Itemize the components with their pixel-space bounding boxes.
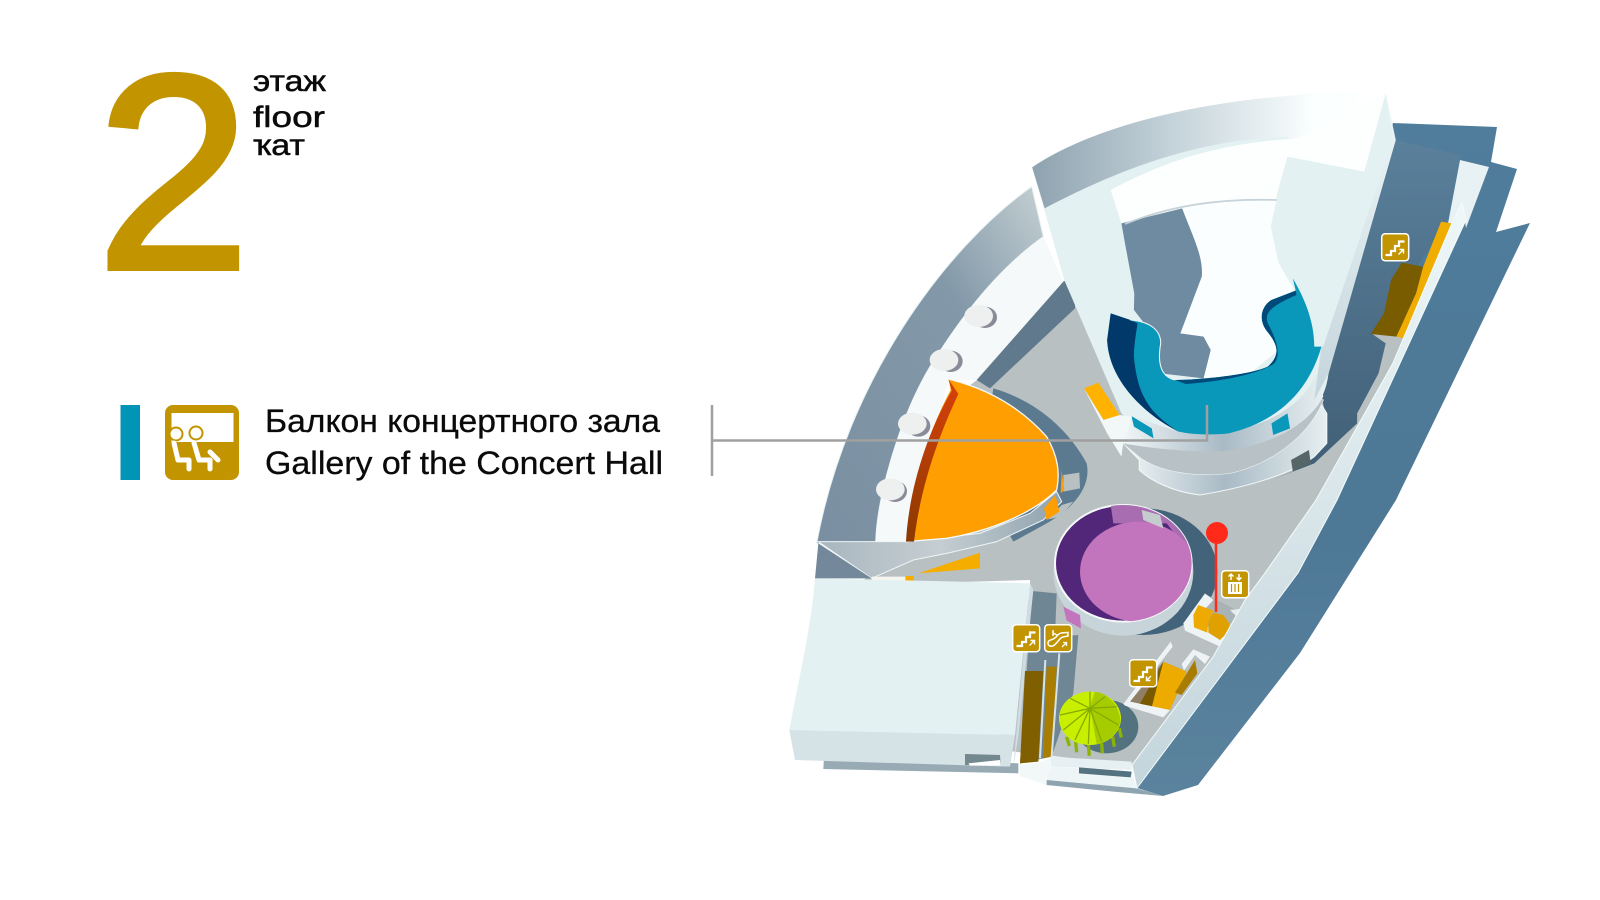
dome bbox=[1059, 692, 1121, 745]
cube two bbox=[1208, 613, 1229, 640]
dome columns bbox=[1067, 728, 1121, 756]
floor stubs in shadow bbox=[1048, 473, 1080, 519]
lower outer ring bbox=[1123, 393, 1327, 495]
hall stage shadow bbox=[1121, 208, 1211, 378]
balcony side yellow bbox=[1044, 470, 1064, 520]
cylinder shadow bbox=[1069, 508, 1217, 635]
right exterior wall bbox=[1132, 203, 1466, 788]
block door bbox=[965, 754, 1001, 765]
doorway bbox=[1291, 450, 1311, 472]
legend text: Gallery of the Concert Hall bbox=[265, 445, 663, 481]
white central zone bbox=[1111, 93, 1386, 347]
top arc band bbox=[1032, 93, 1386, 208]
icon: seated audience bbox=[165, 405, 239, 480]
lower front face bbox=[1047, 767, 1137, 788]
pale roof strip on the right bbox=[1446, 160, 1489, 234]
entrance base bbox=[1020, 758, 1137, 788]
dome ribs bbox=[1060, 692, 1118, 744]
floor label bbox=[253, 65, 326, 162]
dark blue lip bbox=[1175, 291, 1296, 384]
elevator cabin bbox=[1183, 593, 1245, 647]
cube one bbox=[1193, 605, 1213, 633]
tray walls bbox=[1183, 593, 1230, 647]
white stage centre bbox=[1180, 198, 1295, 378]
stair box right bbox=[1182, 649, 1210, 671]
narrow stairs bbox=[1043, 667, 1057, 758]
sloped stair bbox=[1175, 660, 1197, 695]
location pin bbox=[1206, 522, 1228, 612]
columns bbox=[876, 305, 997, 502]
shadow beside block bbox=[1020, 591, 1078, 763]
lower stairs brown bbox=[1138, 662, 1170, 708]
dark blue inner wall bbox=[1107, 313, 1179, 432]
cylinder outer wall bbox=[1053, 508, 1193, 636]
east stairs yellow bbox=[1396, 222, 1452, 338]
stage arc line bbox=[1125, 200, 1277, 224]
stair tray wall bbox=[1123, 642, 1173, 717]
concert hall bbox=[1032, 93, 1452, 495]
right side wall bbox=[1314, 93, 1396, 400]
icon: stairs down bbox=[1130, 660, 1157, 687]
legend text: Балкон концертного зала bbox=[265, 403, 660, 439]
block front bbox=[789, 730, 1015, 767]
right pale panel bbox=[1271, 93, 1393, 347]
left pale panel bbox=[1045, 183, 1126, 377]
grey arc band bbox=[817, 187, 1043, 543]
outer cast shadow bbox=[1137, 123, 1530, 796]
blue seating bbox=[1107, 278, 1321, 434]
tray shadow floor bbox=[1183, 594, 1245, 647]
ring deck bbox=[1123, 393, 1323, 474]
purple cylinder room bbox=[1053, 500, 1217, 636]
dome shadow bbox=[1075, 700, 1138, 753]
icon: escalator bbox=[1045, 625, 1072, 652]
stair tray floor bbox=[1130, 662, 1187, 710]
floor label: ҡат bbox=[253, 129, 305, 162]
outer arc gallery bbox=[815, 187, 1087, 582]
back wall pieces bbox=[1230, 608, 1245, 620]
balcony seating bbox=[906, 379, 1058, 542]
leader line bbox=[712, 405, 1207, 476]
dome shaded sector bbox=[1090, 692, 1120, 744]
block base shadow bbox=[823, 757, 1018, 773]
big number 2: 2 bbox=[96, 16, 251, 328]
seating outline bbox=[1130, 320, 1175, 380]
floor plan building bbox=[789, 93, 1530, 796]
floor label: этаж bbox=[253, 65, 326, 98]
side opening bbox=[1063, 607, 1081, 628]
dark recess bbox=[815, 543, 872, 578]
block roof bbox=[789, 578, 1030, 735]
lit back wall bbox=[1110, 505, 1191, 555]
brown stairs bbox=[1020, 671, 1043, 763]
small white wall bbox=[1084, 388, 1132, 457]
off-white gap bbox=[872, 577, 906, 582]
small yellow stairs bbox=[1084, 383, 1120, 420]
stair rails bbox=[1040, 653, 1059, 758]
icon: elevator bbox=[1222, 571, 1249, 598]
front slit bbox=[1079, 767, 1132, 777]
hall body bbox=[1032, 93, 1396, 450]
block side bbox=[1013, 583, 1033, 767]
white walkway bbox=[876, 237, 1063, 543]
east stairs brown bbox=[1371, 263, 1423, 337]
lower front lip bbox=[1050, 757, 1132, 770]
icon: stairs up, east bbox=[1382, 234, 1409, 261]
blue windows bbox=[1131, 413, 1290, 438]
yellow under balcony bbox=[905, 553, 980, 582]
front base shadow bbox=[1047, 780, 1163, 796]
legend text bbox=[265, 403, 663, 481]
main floor bbox=[860, 223, 1452, 765]
west block and lower details bbox=[789, 578, 1210, 796]
inner dark wall bbox=[977, 275, 1075, 388]
balcony back strip bbox=[906, 379, 958, 542]
shadow strip between hall and wall bbox=[1271, 140, 1461, 480]
icon: stairs up, west bbox=[1013, 625, 1040, 652]
inner ring wall bbox=[1123, 367, 1323, 451]
cylinder interior bbox=[1055, 505, 1192, 622]
balcony cast shadow bbox=[980, 388, 1087, 542]
balcony lower wall bbox=[818, 492, 1062, 578]
legend colour bar bbox=[120, 405, 140, 480]
purple floor bbox=[1080, 522, 1197, 622]
lower stairs yellow bbox=[1152, 662, 1187, 710]
floor label: floor bbox=[253, 101, 325, 134]
